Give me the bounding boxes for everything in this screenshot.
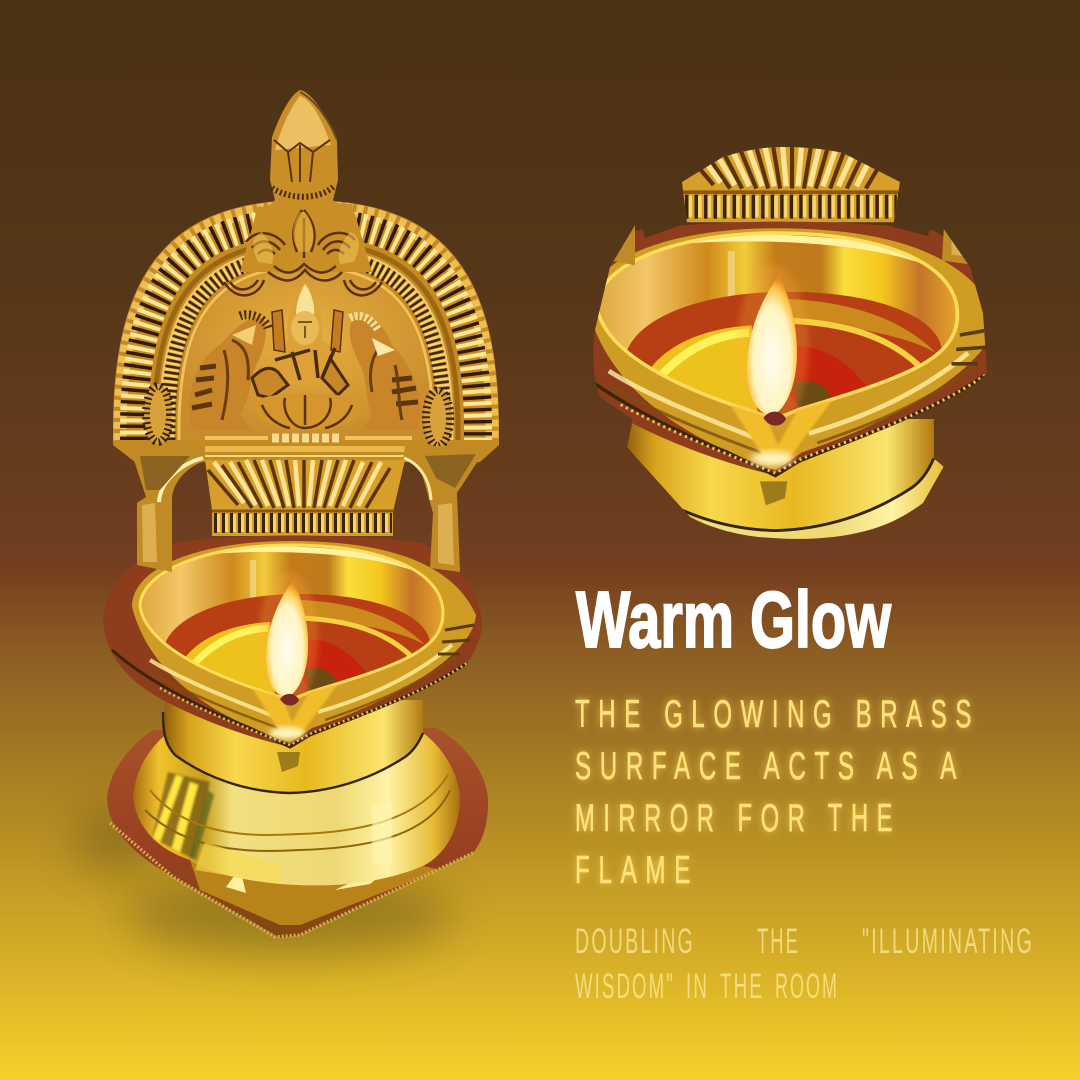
side pilasters xyxy=(144,384,452,448)
illustration: zoomed crop of lamp bowl with flame xyxy=(593,147,987,539)
goddess figure relief xyxy=(252,282,348,398)
body text: THE xyxy=(720,967,764,1006)
central relief field xyxy=(181,269,431,440)
body text: DOUBLING xyxy=(575,922,695,961)
left elephant relief xyxy=(189,315,268,430)
lotus throne xyxy=(150,393,460,456)
subheading: FLAME xyxy=(575,849,699,892)
subheading xyxy=(575,693,980,892)
top scroll ornaments xyxy=(224,210,382,295)
title: Warm Glow xyxy=(576,575,892,664)
spire finial xyxy=(240,90,372,272)
body text: IN xyxy=(686,967,709,1006)
arch radial grooves xyxy=(134,222,478,440)
lamp shadow xyxy=(75,810,455,955)
body text: WISDOM" xyxy=(575,967,675,1006)
lamp foot plate xyxy=(107,728,488,938)
arch outer scalloped ring xyxy=(113,200,499,462)
body text xyxy=(575,922,1034,1006)
body text: ROOM xyxy=(775,967,839,1006)
kirtimukha arch xyxy=(113,90,499,462)
lamp bowl, flame and bell base xyxy=(103,446,483,885)
illustration: full standing Gajalakshmi lamp xyxy=(103,90,499,938)
right elephant relief xyxy=(350,316,421,430)
body text: THE xyxy=(757,922,800,961)
